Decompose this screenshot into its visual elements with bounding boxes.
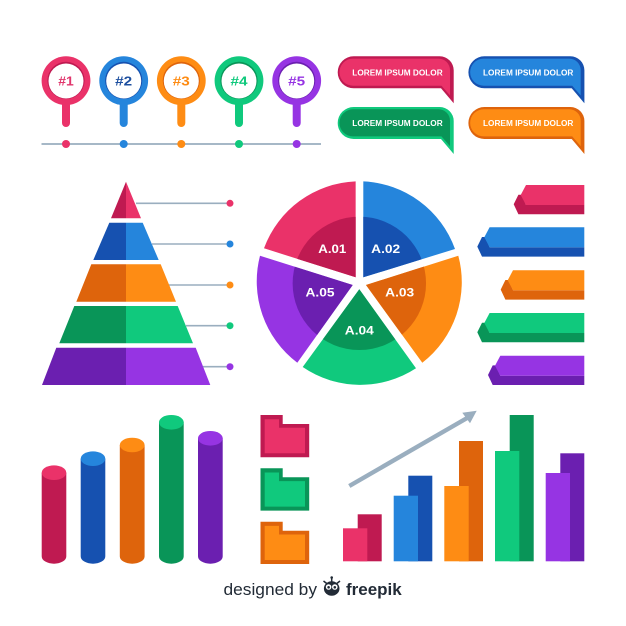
cylinder: pink xyxy=(42,465,66,564)
bubble: green: LOREM IPSUM DOLOR xyxy=(352,118,443,128)
bubble: blue: LOREM IPSUM DOLOR xyxy=(483,67,574,77)
icon: pink folder xyxy=(260,415,309,457)
pin #4 xyxy=(215,56,263,148)
pyramid tier 4 xyxy=(59,306,193,343)
pin #4: #4 xyxy=(230,74,248,88)
pin #1: #1 xyxy=(58,74,74,88)
pyramid leader lines xyxy=(136,203,230,367)
panel: bar chart with trend arrow xyxy=(343,411,584,561)
bars: orange xyxy=(444,441,483,561)
pin #2 xyxy=(99,56,148,148)
bubble: pink: LOREM IPSUM DOLOR xyxy=(352,67,443,77)
bars: pink xyxy=(343,514,382,561)
bubble: blue xyxy=(468,56,584,103)
bars: green xyxy=(495,415,534,561)
infographic canvas xyxy=(42,56,584,598)
panel: speech bubbles xyxy=(338,56,584,154)
pin #1 xyxy=(42,56,90,148)
bubble: green xyxy=(338,107,454,154)
pin #3: #3 xyxy=(173,74,190,88)
icon: freepik mascot xyxy=(324,576,340,596)
arrow: upward trend xyxy=(348,411,477,488)
pin #5 xyxy=(272,56,321,148)
cylinder: purple xyxy=(198,431,223,564)
slice A.02: A.02 xyxy=(371,242,401,256)
slice A.04: A.04 xyxy=(345,324,374,338)
pin #2: #2 xyxy=(115,74,132,88)
slice A.01: A.01 xyxy=(318,242,347,256)
slice A.04 xyxy=(303,289,416,385)
bubble: orange xyxy=(468,107,584,154)
ribbon: green xyxy=(477,313,584,342)
cylinder: blue xyxy=(81,451,105,564)
slice A.05: A.05 xyxy=(306,286,335,300)
panel: pie chart xyxy=(257,181,462,385)
ribbon: blue xyxy=(477,227,584,257)
ribbon: pink xyxy=(514,185,584,214)
brand name: freepik xyxy=(346,580,402,599)
slice A.01 xyxy=(264,181,356,277)
bars: purple xyxy=(546,453,584,561)
panel: cylinder chart xyxy=(42,415,223,564)
slice A.05 xyxy=(257,256,353,363)
ribbon: orange xyxy=(501,270,584,300)
cylinder: green xyxy=(159,415,184,564)
credit text: designed by xyxy=(224,581,318,599)
cylinder: orange xyxy=(120,438,145,564)
icon: orange folder xyxy=(260,522,309,564)
bubble: pink xyxy=(338,56,454,103)
pin #3 xyxy=(157,56,206,148)
pyramid leader dots xyxy=(226,200,234,370)
slice A.03: A.03 xyxy=(385,286,415,300)
panel: arrow ribbons xyxy=(477,185,584,385)
slice A.02 xyxy=(363,181,455,277)
pyramid tier 2 xyxy=(93,223,159,260)
bubble: orange: LOREM IPSUM DOLOR xyxy=(483,118,574,128)
bars: blue xyxy=(394,476,432,561)
pyramid tier 5 xyxy=(42,348,210,385)
panel: pyramid chart xyxy=(42,182,234,385)
pin #5: #5 xyxy=(288,74,305,88)
slice A.03 xyxy=(366,256,462,363)
pyramid tier 1 xyxy=(111,182,141,218)
ribbon: purple xyxy=(488,356,584,385)
panel: numbered pins timeline xyxy=(42,56,321,148)
panel: folder icons xyxy=(260,415,309,564)
footer: freepik credit xyxy=(224,576,402,599)
icon: green folder xyxy=(260,468,309,511)
pyramid tier 3 xyxy=(76,264,176,302)
